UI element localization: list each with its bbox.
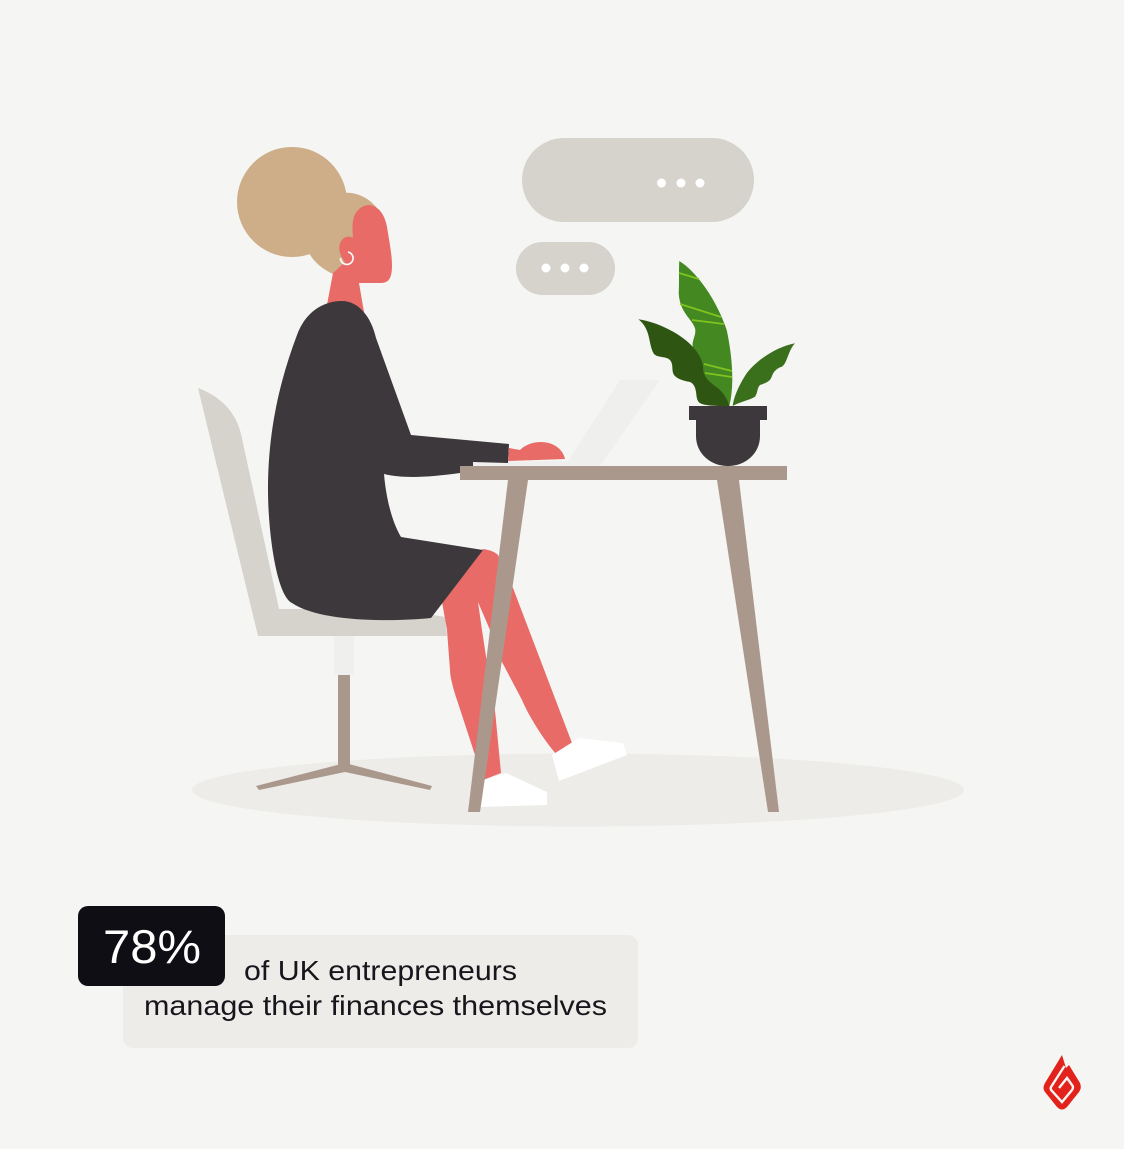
legs	[442, 549, 572, 780]
logo: red flame	[1044, 1055, 1081, 1110]
hair bun	[237, 147, 347, 257]
speech bubble: large	[522, 138, 754, 222]
hand	[508, 442, 565, 461]
right leaf	[733, 343, 795, 406]
woman figure	[237, 147, 627, 807]
shoe right	[552, 738, 627, 781]
statistic text	[144, 955, 607, 1021]
chair	[198, 388, 447, 790]
hair	[309, 193, 377, 275]
leaf stripes	[679, 273, 732, 377]
pot	[689, 406, 767, 466]
earring	[340, 252, 353, 264]
shoe left	[480, 773, 547, 807]
speech bubble: small	[516, 242, 615, 295]
statistic text: of UK entrepreneurs	[244, 955, 517, 986]
statistic badge: 78%	[103, 920, 201, 973]
ground shadow ellipse	[192, 754, 964, 826]
statistic panel	[123, 935, 638, 1048]
statistic badge	[78, 906, 225, 986]
main leaf	[679, 261, 732, 406]
statistic text: manage their finances themselves	[144, 990, 607, 1021]
laptop	[473, 380, 660, 466]
dress	[268, 301, 509, 620]
desk	[460, 466, 787, 812]
dark leaf	[638, 319, 729, 406]
head and neck	[326, 205, 392, 312]
potted plant	[638, 261, 795, 466]
